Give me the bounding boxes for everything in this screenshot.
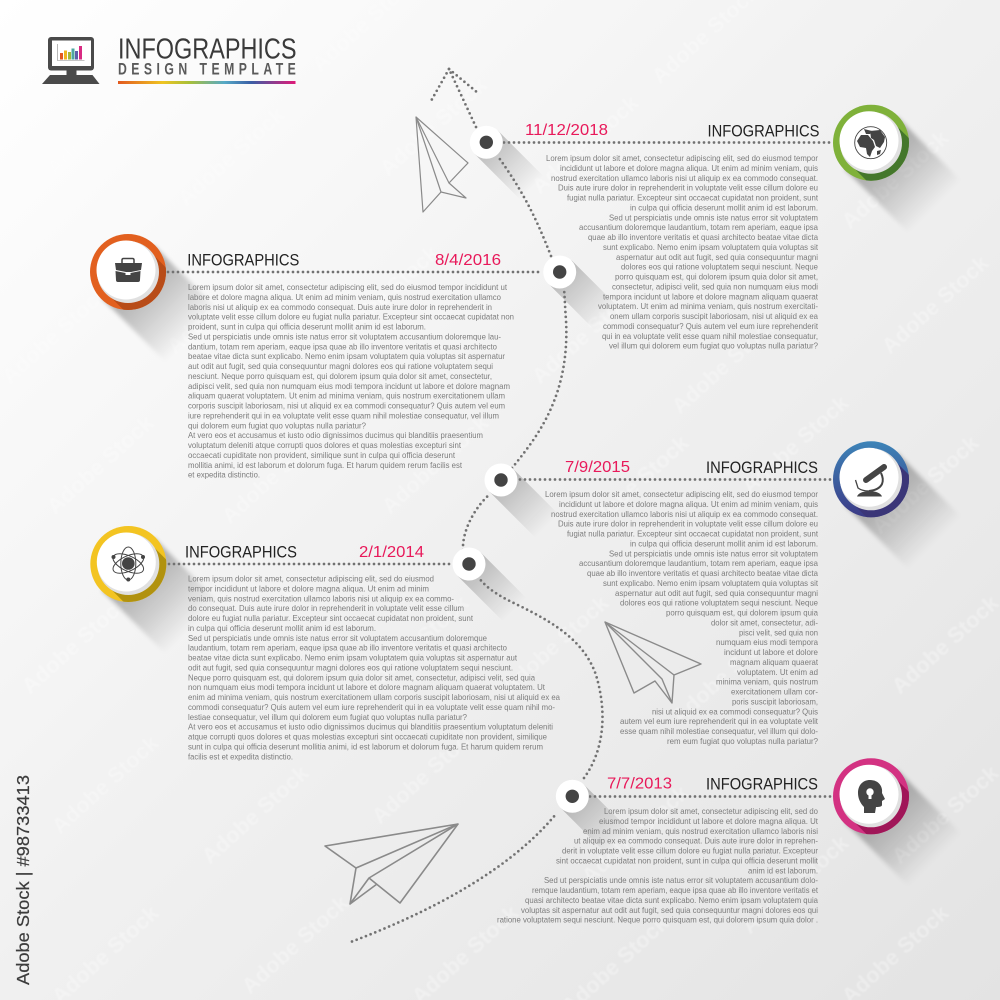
entry 2016: body text: labore et dolore magna aliqua. Ut enim ad minim veniam, quis nostrud exercitation ullamco: [188, 292, 501, 302]
paper plane: middle: [605, 622, 701, 703]
entry 2015: body text: voluptatem. Ut enim ad: [737, 667, 818, 677]
badge: briefcase (orange): [90, 234, 166, 310]
long shadows of large circles: [128, 143, 935, 860]
entry 2014: body text: At vero eos et accusamus et iusto odio dignissimos ducimus qui blanditiis praesentium voluptatum deleniti: [188, 722, 553, 732]
entry 2013: body text: enim ad minim veniam, quis nostrud exercitation ullamco laboris nisi: [583, 826, 818, 836]
icon: microscope: [856, 467, 884, 496]
entry 2014: body text: dolore eu fugiat nulla pariatur. Excepteur sint occaecat cupidatat non proident, sunt: [188, 613, 474, 623]
entry 2016: body text: Sed ut perspiciatis unde omnis iste natus error sit voluptatem accusantium doloremque lau-: [188, 331, 501, 341]
badge: atom (yellow): [90, 526, 166, 602]
entry 2015: body text: exercitationem ullam cor-: [731, 687, 818, 697]
entry 2016: body text: voluptate velit esse cillum dolore eu fugiat nulla pariatur. Excepteur sint occaecat cupidatat non: [188, 312, 514, 322]
Adobe Stock watermarks: Adobe Stock: [887, 760, 1000, 869]
entry 2015: body text: in culpa qui officia deserunt mollit anim id est laborum.: [630, 538, 818, 548]
entry 2014: body text: non numquam eius modi tempora incidunt ut labore et dolore magnam aliquam quaerat voluptatem. Ut: [188, 682, 546, 692]
entry 2016: body text: beatae vitae dicta sunt explicabo. Nemo enim ipsam voluptatem quia voluptas sit aspernatur: [188, 351, 505, 361]
entry 2018: body text: [546, 153, 819, 351]
entry 2018: body text: in culpa qui officia deserunt mollit anim id est laborum.: [630, 202, 818, 212]
entry 2015: body text: porro quisquam est, qui dolorem ipsum quia: [666, 608, 818, 618]
entry 2016: body text: proident, sunt in culpa qui officia deserunt mollit anim id est laborum.: [188, 322, 426, 332]
entry 2015: body text: dolores eos qui ratione voluptatem sequi nesciunt. Neque: [620, 598, 818, 608]
entry 2014: body text: Neque porro quisquam est, qui dolorem ipsum quia dolor sit amet, consectetur, adipisci velit, sed quia: [188, 672, 535, 682]
entry 2018: body text: aspernatur aut odit aut fugit, sed quia consequuntur magni: [616, 252, 818, 262]
entry 2015: body text: rem eum fugiat quo voluptas nulla pariatur?: [667, 736, 818, 746]
entry 2018: body text: porro quisquam est, qui dolorem ipsum quia dolor sit amet,: [615, 272, 818, 282]
entry 2015: body text: Sed ut perspiciatis unde omnis iste natus error sit voluptatem: [609, 548, 818, 558]
header title: INFOGRAPHICS: [118, 34, 296, 66]
Adobe Stock watermarks: Adobe Stock: [237, 890, 354, 999]
entry 2016: body text: corporis suscipit laboriosam, nisi ut aliquid ex ea commodi consequatur? Quis autem vel eum: [188, 401, 505, 411]
Adobe Stock watermarks: Adobe Stock: [217, 420, 334, 529]
entry 2015: body text: [545, 489, 819, 746]
entry 2015: body text: Duis aute irure dolor in reprehenderit in voluptate velit esse cillum dolore eu: [558, 519, 818, 529]
entry 2018: body text: qui in ea voluptate velit esse quam nihil molestiae consequatur,: [602, 331, 818, 341]
entry 2018: body text: commodi consequatur? Quis autem vel eum iure reprehenderit: [603, 321, 819, 331]
entry 2014: body text: Lorem ipsum dolor sit amet, consectetur adipiscing elit, sed do eiusmod: [188, 574, 434, 584]
Adobe Stock watermarks: Adobe Stock: [377, 410, 494, 519]
Adobe Stock watermarks: Adobe Stock: [375, 72, 492, 181]
entry 2013: body text: eiusmod tempor incididunt ut labore et dolore magna aliqua. Ut: [599, 816, 819, 826]
Adobe Stock watermarks: Adobe Stock: [527, 280, 644, 389]
header title: [118, 34, 296, 84]
paper plane: bottom: [325, 824, 458, 904]
Adobe Stock watermarks: Adobe Stock: [667, 150, 784, 259]
entry 2015: body text: fugiat nulla pariatur. Excepteur sint occaecat cupidatat non proident, sunt: [567, 528, 819, 538]
entry 2014: body text: lestiae consequatur, vel illum qui dolorem eum fugiat quo voluptas nulla pariatur?: [188, 712, 467, 722]
entry 2018: body text: tempora incidunt ut labore et dolore magnam aliquam quaerat: [603, 291, 819, 301]
entry 2015: body text: pisci velit, sed quia non: [739, 627, 818, 637]
Adobe Stock watermarks: Adobe Stock: [173, 102, 290, 211]
entry 2016: body text: adipisci velit, sed quia non numquam eius modi tempora incidunt ut labore et dolore magnam: [188, 381, 510, 391]
entry 2014: body text: laudantium, totam rem aperiam, eaque ipsa quae ab illo inventore veritatis et quasi architecto: [188, 643, 507, 653]
entry 2016: body text: voluptatum deleniti atque corrupti quos dolores et quas molestias excepturi sint: [188, 440, 462, 450]
entry 2016: body text: nesciunt. Neque porro quisquam est, qui dolorem ipsum quia dolor sit amet, consectetur,: [188, 371, 492, 381]
entry 2013: body text: [497, 806, 819, 925]
entry 2018: body text: sunt explicabo. Nemo enim ipsam voluptatem quia voluptas sit: [603, 242, 819, 252]
entry 2014: body text: Sed ut perspiciatis unde omnis iste natus error sit voluptatem accusantium doloremque: [188, 633, 487, 643]
Adobe Stock watermarks: Adobe Stock: [47, 730, 164, 839]
entry 2014: body text: do consequat. Duis aute irure dolor in reprehenderit in voluptate velit esse cillum: [188, 603, 464, 613]
entry 2013: body text: anim id est laborum.: [748, 865, 818, 875]
entry 2016: body text: et expedita distinctio.: [188, 470, 260, 480]
entry 2015: body text: incidunt ut labore et dolore: [724, 647, 818, 657]
Adobe Stock watermarks: Adobe Stock: [837, 125, 954, 234]
timeline nodes: [452, 126, 589, 813]
entry 2013: body text: voluptas sit aspernatur aut odit aut fugit, sed quia consequuntur magni dolores eos qui: [521, 905, 818, 915]
long shadows of timeline nodes: [469, 142, 618, 842]
entry 2018: body text: voluptatem. Ut enim ad minima veniam, quis nostrum exercitati-: [598, 301, 818, 311]
entry 2014: body text: odit aut fugit, sed quia consequuntur magni dolores eos qui ratione voluptatem sequi nesciunt.: [188, 662, 513, 672]
entry 2016: body text: aut odit aut fugit, sed quia consequuntur magni dolores eos qui ratione voluptatem sequi: [188, 361, 493, 371]
entry 2018: title: INFOGRAPHICS: [708, 122, 820, 140]
entry 2016: body text: iure reprehenderit qui in ea voluptate velit esse quam nihil molestiae consequatur, vel illum: [188, 410, 499, 420]
entry 2015: body text: Lorem ipsum dolor sit amet, consectetur adipiscing elit, sed do eiusmod tempor: [545, 489, 818, 499]
entry 2016: date: 8/4/2016: [435, 252, 501, 269]
entry 2014: body text: in culpa qui officia deserunt mollit anim id est laborum.: [188, 623, 376, 633]
entry 2015: body text: dolor sit amet, consectetur, adi-: [711, 617, 818, 627]
Adobe Stock watermarks: Adobe Stock: [197, 760, 314, 869]
badge: head with bulb (pink): [833, 758, 909, 834]
entry 2016: body text: At vero eos et accusamus et iusto odio dignissimos ducimus qui blanditiis praesentium: [188, 430, 483, 440]
entry 2018: body text: Duis aute irure dolor in reprehenderit in voluptate velit esse cillum dolore eu: [558, 183, 818, 193]
entry 2016: body text: dantium, totam rem aperiam, eaque ipsa quae ab illo inventore veritatis et quasi architecto: [188, 341, 497, 351]
entry 2016: body text: laboris nisi ut aliquip ex ea commodo consequat. Duis aute irure dolor in reprehenderit in: [188, 302, 492, 312]
Adobe Stock watermarks: Adobe Stock: [367, 720, 484, 829]
entry 2013: body text: Sed ut perspiciatis unde omnis iste natus error sit voluptatem accusantium dolo-: [544, 875, 818, 885]
entry 2018: body text: dolores eos qui ratione voluptatem sequi nesciunt. Neque: [621, 262, 818, 272]
entry 2014: date: 2/1/2014: [359, 544, 424, 561]
entry 2018: body text: incididunt ut labore et dolore magna aliqua. Ut enim ad minim veniam, quis: [560, 163, 819, 173]
entry 2013: body text: derit in voluptate velit esse cillum dolore eu fugiat nulla pariatur. Excepteur: [562, 846, 818, 856]
entry 2015: title: INFOGRAPHICS: [706, 459, 818, 477]
Adobe Stock watermarks: Adobe Stock: [42, 72, 159, 181]
entry 2018: body text: Sed ut perspiciatis unde omnis iste natus error sit voluptatem: [609, 212, 818, 222]
entry 2013: body text: sint occaecat cupidatat non proident, sunt in culpa qui officia deserunt mollit: [556, 855, 819, 865]
entry 2018: body text: nostrud exercitation ullamco laboris nisi ut aliquip ex ea commodo consequat.: [551, 173, 818, 183]
entry 2018: body text: fugiat nulla pariatur. Excepteur sint occaecat cupidatat non proident, sunt: [567, 192, 819, 202]
Adobe Stock watermarks: Adobe Stock: [187, 580, 304, 689]
entry 2013: body text: quasi architecto beatae vitae dicta sunt explicabo. Nemo enim ipsam voluptatem quia: [525, 895, 818, 905]
entry 2013: body text: ratione voluptatem sequi nesciunt. Neque porro quisquam est, qui dolorem ipsum quia dolor .: [497, 915, 818, 925]
entry 2014: title: INFOGRAPHICS: [185, 544, 297, 562]
Adobe Stock watermarks: Adobe Stock: [667, 620, 784, 729]
Adobe Stock watermarks: Adobe Stock: [737, 390, 854, 499]
Adobe Stock watermarks: Adobe Stock: [357, 590, 474, 699]
Adobe Stock watermarks: Adobe Stock: [577, 780, 694, 889]
entry 2014: body text: atque corrupti quos dolores et quas molestias excepturi sint occaecati cupiditate non provident, similique: [188, 732, 547, 742]
Adobe Stock watermarks: Adobe Stock: [887, 590, 1000, 699]
badge: microscope (blue): [833, 441, 909, 517]
icon: head with bulb: [858, 780, 885, 813]
entry 2014: body text: veniam, quis nostrud exercitation ullamco laboris nisi ut aliquip ex ea commo-: [188, 593, 454, 603]
entry 2014: body text: enim ad minima veniam, quis nostrum exercitationem ullam corporis suscipit laboriosam, nisi ut aliquid ex ea: [188, 692, 560, 702]
Adobe Stock watermarks: Adobe Stock: [577, 430, 694, 539]
Adobe Stock watermarks: Adobe Stock: [497, 590, 614, 699]
entry 2013: date: 7/7/2013: [607, 776, 672, 793]
entry 2016: body text: qui dolorem eum fugiat quo voluptas nulla pariatur?: [188, 420, 366, 430]
entry 2016: title: INFOGRAPHICS: [187, 252, 299, 270]
entry 2015: body text: incididunt ut labore et dolore magna aliqua. Ut enim ad minim veniam, quis: [559, 499, 819, 509]
entry 2013: body text: remque laudantium, totam rem aperiam, eaque ipsa quae ab illo inventore veritatis et: [532, 885, 819, 895]
Adobe Stock watermarks: Adobe Stock: [667, 310, 784, 419]
vertical stock id: Adobe Stock | #98733413: [13, 775, 33, 985]
entry 2015: body text: accusantium doloremque laudantium, totam rem aperiam, eaque ipsa: [579, 558, 818, 568]
entry 2013: body text: ut aliquip ex ea commodo consequat. Duis aute irure dolor in reprehen-: [574, 836, 818, 846]
entry 2015: body text: esse quam nihil molestiae consequatur, vel illum qui dolo-: [620, 726, 818, 736]
entry 2015: body text: aspernatur aut odit aut fugit, sed quia consequuntur magni: [615, 588, 818, 598]
header title: DESIGN TEMPLATE: [118, 61, 296, 79]
Adobe Stock watermarks: Adobe Stock: [162, 250, 279, 359]
entry 2013: title: INFOGRAPHICS: [706, 776, 818, 794]
entry 2016: body text: mollitia animi, id est laborum et dolorum fuga. Et harum quidem rerum facilis est: [188, 460, 463, 470]
entry 2015: body text: poris suscipit laboriosam,: [732, 696, 818, 706]
entry 2018: body text: Lorem ipsum dolor sit amet, consectetur adipiscing elit, sed do eiusmod tempor: [546, 153, 818, 163]
entry 2015: body text: magnam aliquam quaerat: [730, 657, 819, 667]
entry 2018: body text: quae ab illo inventore veritatis et quasi architecto beatae vitae dicta: [588, 232, 818, 242]
entry 2014: body text: tempor incididunt ut labore et dolore magna aliqua. Ut enim ad minim: [188, 583, 429, 593]
entry 2015: body text: quae ab illo inventore veritatis et quasi architecto beatae vitae dicta: [587, 568, 818, 578]
Adobe Stock watermarks: Adobe Stock: [42, 410, 159, 519]
entry 2014: body text: [188, 574, 560, 761]
Adobe Stock watermarks: Adobe Stock: [17, 590, 134, 699]
Adobe Stock watermarks: Adobe Stock: [327, 240, 444, 349]
entry 2014: body text: sunt in culpa qui officia deserunt mollitia animi, id est laborum et dolorum fuga. Et harum quidem rerum: [188, 742, 543, 752]
header logo: monitor icon: [42, 37, 100, 84]
entry 2015: body text: sunt explicabo. Nemo enim ipsam voluptatem quia voluptas sit: [603, 578, 819, 588]
entry 2015: body text: nostrud exercitation ullamco laboris nisi ut aliquip ex ea commodo consequat.: [551, 509, 818, 519]
entry 2014: body text: facilis est et expedita distinctio.: [188, 751, 293, 761]
entry 2018: body text: onem ullam corporis suscipit laboriosam, nisi ut aliquid ex ea: [610, 311, 818, 321]
icon: atom: [110, 547, 146, 581]
entry 2014: body text: beatae vitae dicta sunt explicabo. Nemo enim ipsam voluptatem quia voluptas sit aspernatur aut: [188, 652, 518, 662]
entry 2016: body text: Lorem ipsum dolor sit amet, consectetur adipiscing elit, sed do eiusmod tempor incididunt ut: [188, 282, 508, 292]
entry 2018: body text: accusantium doloremque laudantium, totam rem aperiam, eaque ipsa: [579, 222, 818, 232]
entry 2018: body text: vel illum qui dolorem eum fugiat quo voluptas nulla pariatur?: [609, 341, 818, 351]
Adobe Stock watermarks: Adobe Stock: [867, 430, 984, 539]
Adobe Stock watermarks: Adobe Stock: [0, 280, 114, 389]
Adobe Stock watermarks: Adobe Stock: [737, 830, 854, 939]
entry 2015: body text: nisi ut aliquid ex ea commodi consequatur? Quis: [652, 706, 819, 716]
dotted flight path with arrowhead: [352, 69, 602, 942]
entry 2015: body text: minima veniam, quis nostrum: [716, 677, 818, 687]
icon: briefcase: [115, 258, 142, 282]
entry 2015: date: 7/9/2015: [565, 459, 630, 476]
entry 2016: body text: occaecati cupiditate non provident, similique sunt in culpa qui officia deserunt: [188, 450, 456, 460]
entry 2018: body text: consectetur, adipisci velit, sed quia non numquam eius modi: [612, 281, 818, 291]
entry 2015: body text: numquam eius modi tempora: [716, 637, 818, 647]
entry 2016: body text: [188, 282, 514, 480]
badge: globe (green): [833, 105, 909, 181]
entry 2013: body text: Lorem ipsum dolor sit amet, consectetur adipiscing elit, sed do: [604, 806, 818, 816]
icon: globe: [855, 127, 887, 159]
entry 2014: body text: commodi consequatur? Quis autem vel eum iure reprehenderit qui in ea voluptate velit esse quam nihil mo-: [188, 702, 555, 712]
Adobe Stock watermarks: Adobe Stock: [527, 90, 644, 199]
Adobe Stock watermarks: Adobe Stock: [877, 250, 994, 359]
entry 2015: body text: autem vel eum iure reprehenderit qui in ea voluptate velit: [620, 716, 819, 726]
paper plane: top: [416, 117, 468, 212]
dotted connector lines: [168, 142, 832, 796]
entry 2018: date: 11/12/2018: [525, 122, 608, 139]
entry 2016: body text: aliquam quaerat voluptatem. Ut enim ad minima veniam, quis nostrum exercitationem ullam: [188, 391, 505, 401]
